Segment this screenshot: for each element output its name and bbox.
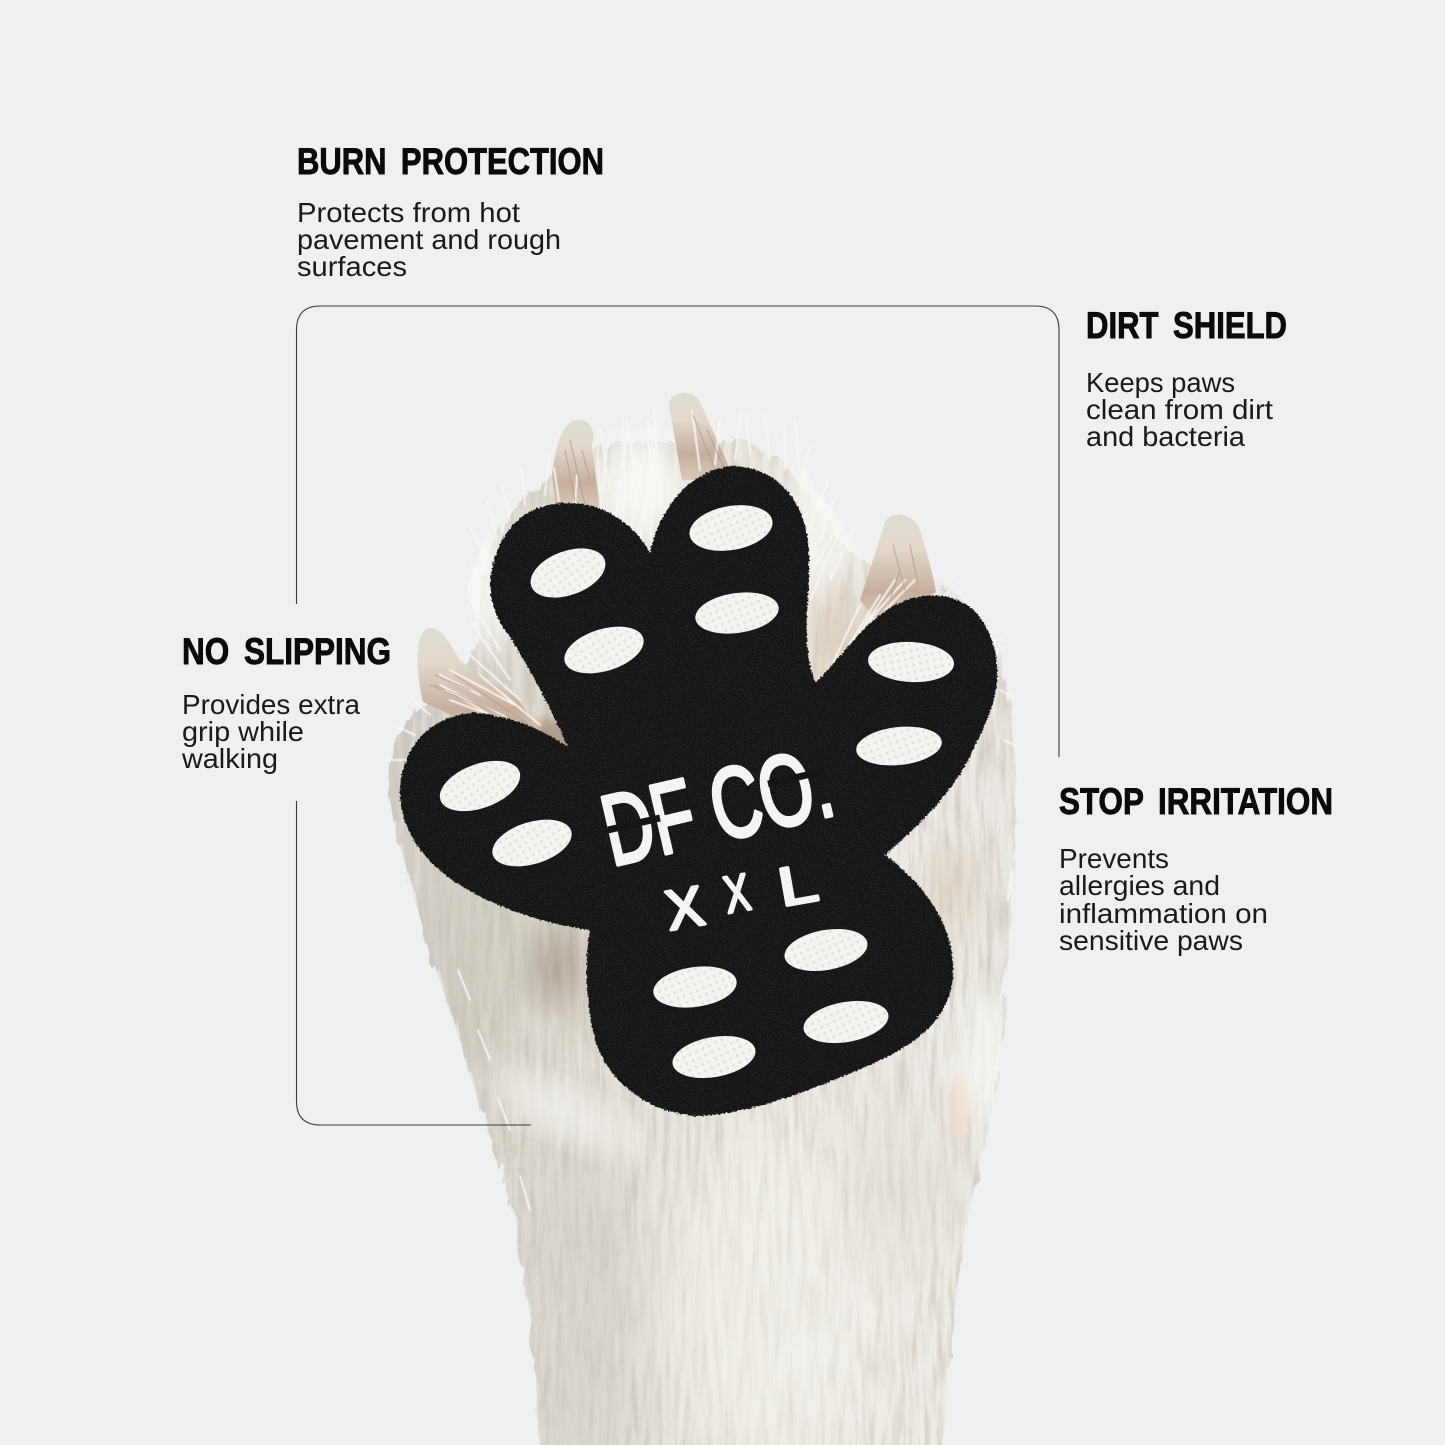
grip dot: heel lower right (800, 995, 892, 1049)
connector lines: lower bracket (296, 801, 531, 1125)
fur shading (395, 435, 1013, 1445)
grip dots (433, 499, 955, 1084)
callout: dirt shield: Keeps paws (1086, 367, 1235, 398)
grip dot: left toe lower (559, 618, 649, 682)
grip dot: thumb upper (433, 751, 527, 821)
grip dot: heel upper left (651, 961, 739, 1013)
pad logo: DF CO. (592, 726, 843, 887)
pad size: X (720, 862, 754, 924)
callout: stop irritation: sensitive paws (1059, 925, 1243, 956)
hair strands: tan (430, 415, 918, 745)
callout: stop irritation: Prevents (1059, 843, 1169, 874)
grip dot: right toe lower (854, 723, 944, 769)
claw: left toe (552, 420, 600, 510)
pad logo (592, 726, 843, 887)
callout: stop irritation: allergies and (1059, 870, 1220, 901)
claw: middle toe (669, 393, 735, 480)
callout: dirt shield: clean from dirt (1086, 394, 1273, 425)
grip dot: middle toe upper (686, 499, 776, 557)
infographic canvas (182, 148, 1332, 1445)
claw: thumb (418, 628, 550, 745)
callout: no slipping: walking (181, 743, 278, 774)
callout: no slipping: NO SLIPPING (182, 631, 391, 672)
callout: stop irritation: inflammation on (1059, 898, 1268, 929)
leg fur (388, 440, 1014, 1445)
callout: stop irritation (1059, 781, 1333, 956)
grip dot: thumb lower (487, 811, 577, 875)
callout: no slipping (181, 631, 391, 774)
dog paw and leg illustration (387, 393, 1016, 1445)
grip dot: heel upper right (781, 923, 871, 977)
grip dot: right toe upper (867, 640, 955, 684)
connector lines: upper bracket (296, 306, 1059, 757)
callout: dirt shield: and bacteria (1086, 421, 1245, 452)
callout: dirt shield (1086, 305, 1287, 452)
callout: no slipping: Provides extra (182, 689, 360, 720)
grip dot: left toe upper (524, 539, 612, 607)
grip dot: middle toe lower (693, 587, 781, 639)
callout: no slipping: grip while (182, 716, 304, 747)
grip pad (400, 466, 997, 1116)
callout: burn protection: pavement and rough (297, 224, 561, 255)
callout: burn protection: Protects from hot (297, 197, 520, 228)
callout: burn protection (297, 141, 604, 282)
pad size: L (773, 852, 822, 918)
pad size: X (661, 874, 708, 942)
callout: burn protection: BURN PROTECTION (297, 141, 604, 182)
claw: right toe (860, 514, 936, 625)
callout: burn protection: surfaces (297, 251, 407, 282)
pad size (661, 852, 822, 942)
callout: dirt shield: DIRT SHIELD (1086, 305, 1287, 346)
hair strands: white (387, 408, 1016, 1210)
callout: stop irritation: STOP IRRITATION (1059, 781, 1333, 822)
grip dot: heel lower left (669, 1030, 759, 1084)
